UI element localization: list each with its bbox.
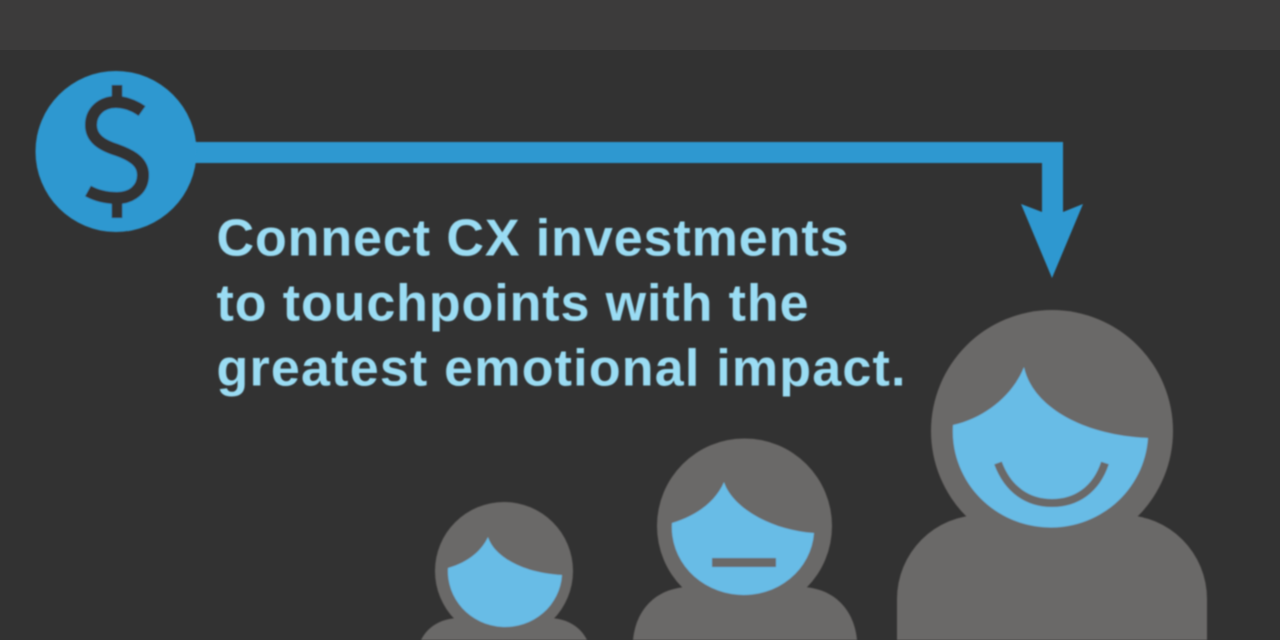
large customer: smiling — [897, 310, 1207, 640]
arrow: from dollar to largest customer — [190, 142, 1083, 278]
text block: message — [216, 210, 906, 398]
text block: message: to touchpoints with the — [216, 274, 808, 332]
small customer: no expression — [421, 502, 587, 640]
top band — [0, 0, 1280, 50]
text block: message: Connect CX investments — [216, 210, 848, 268]
icon: dollar coin — [36, 71, 196, 232]
medium customer: neutral expression — [633, 438, 857, 640]
text block: message: greatest emotional impact. — [216, 340, 906, 398]
